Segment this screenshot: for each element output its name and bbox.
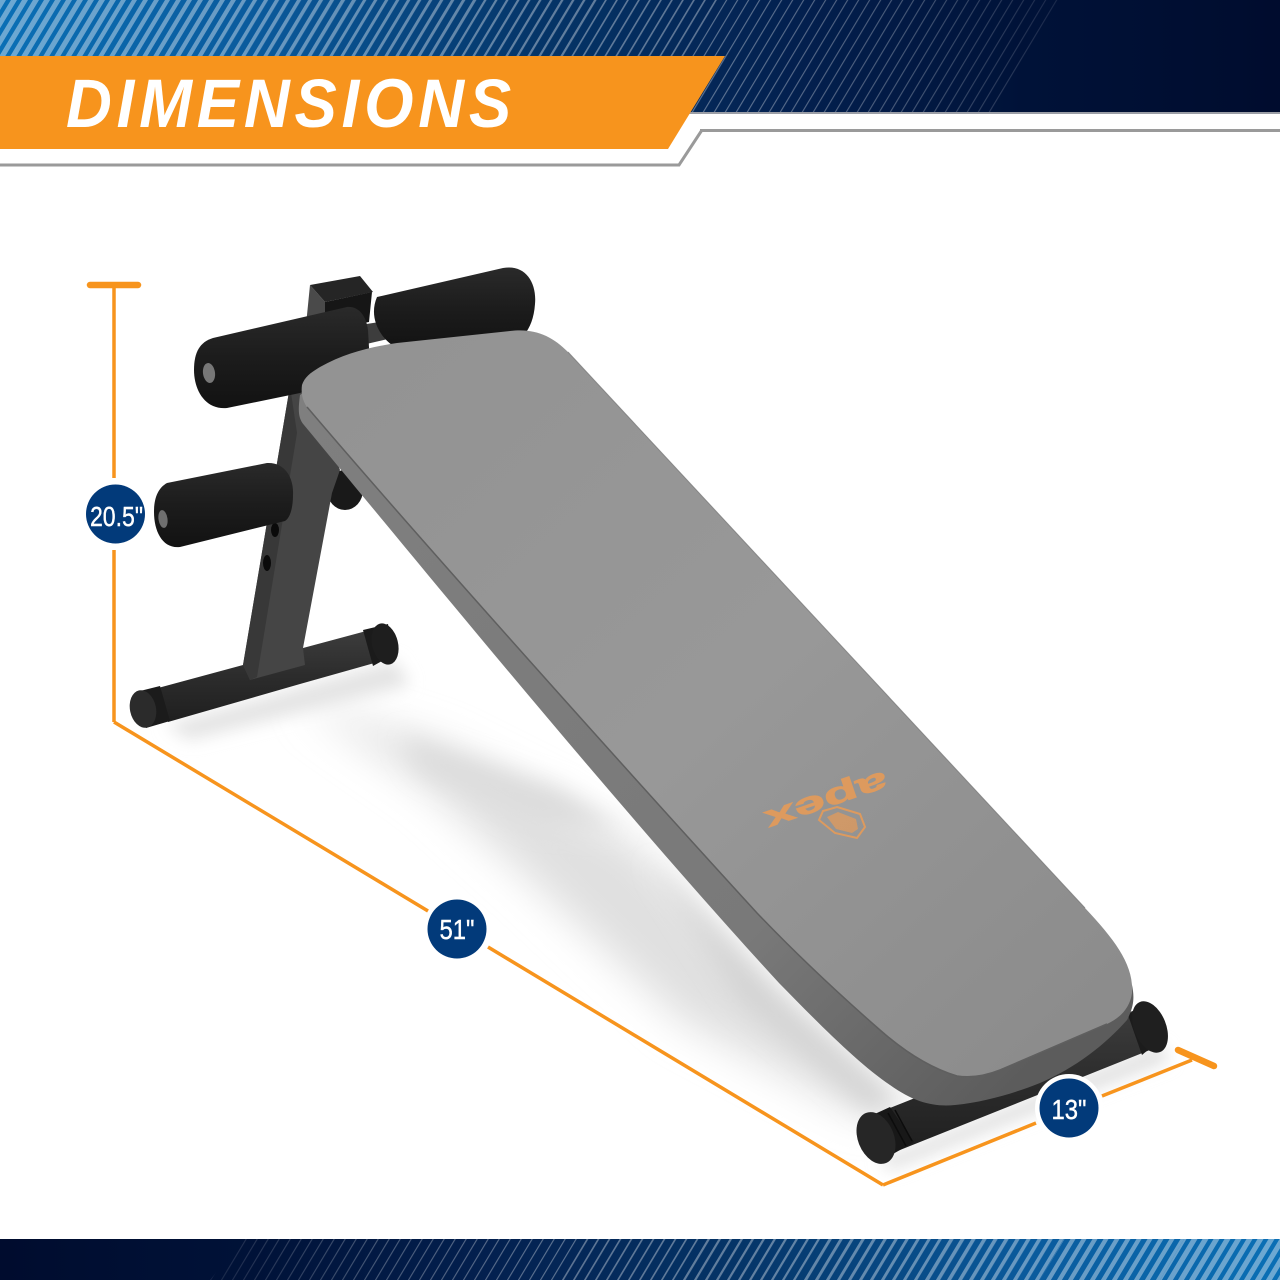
bench pad (299, 330, 1133, 1105)
rear foot bar (158, 630, 378, 722)
hidden rear roller (327, 470, 363, 510)
brand logo (760, 764, 892, 838)
badge: 20.5: 20.5" (90, 501, 143, 532)
header band (0, 0, 1280, 165)
front foot bar (849, 996, 1175, 1170)
badge: 51: 51" (440, 914, 474, 945)
title banner (0, 56, 725, 149)
title: DIMENSIONS (66, 66, 511, 143)
upper right roller (374, 267, 535, 350)
lower roller cap (157, 509, 169, 529)
front right cap (1125, 996, 1175, 1058)
dimension: length 51 inches (114, 722, 883, 1185)
rear foot right cap (363, 620, 403, 668)
rear frame and rollers (126, 267, 535, 730)
floor shadow (165, 660, 1170, 1170)
pad side (299, 380, 1133, 1105)
rear foot left cap (126, 686, 170, 730)
pad top surface (302, 330, 1132, 1077)
dimension: height 20.5 inches (86, 285, 145, 722)
front left cap (849, 1106, 914, 1170)
footer band (0, 1239, 1280, 1280)
brand wordmark: apex (760, 764, 892, 837)
badge: 20.5 (86, 484, 145, 544)
post holes (263, 523, 279, 571)
roller axle (360, 320, 392, 345)
upright post (243, 386, 340, 680)
upper left roller (194, 307, 370, 408)
lower roller (154, 463, 293, 547)
badge: 13 (1035, 1074, 1103, 1142)
dimension: width 13 inches (883, 1050, 1214, 1185)
hexagon badge (819, 807, 865, 838)
badge: 13: 13" (1052, 1094, 1086, 1125)
pad right edge (568, 352, 1085, 908)
mounting bracket (306, 276, 373, 330)
pad stitching (307, 407, 1107, 1077)
badge: 51 (428, 900, 486, 958)
roller end cap (202, 362, 216, 384)
